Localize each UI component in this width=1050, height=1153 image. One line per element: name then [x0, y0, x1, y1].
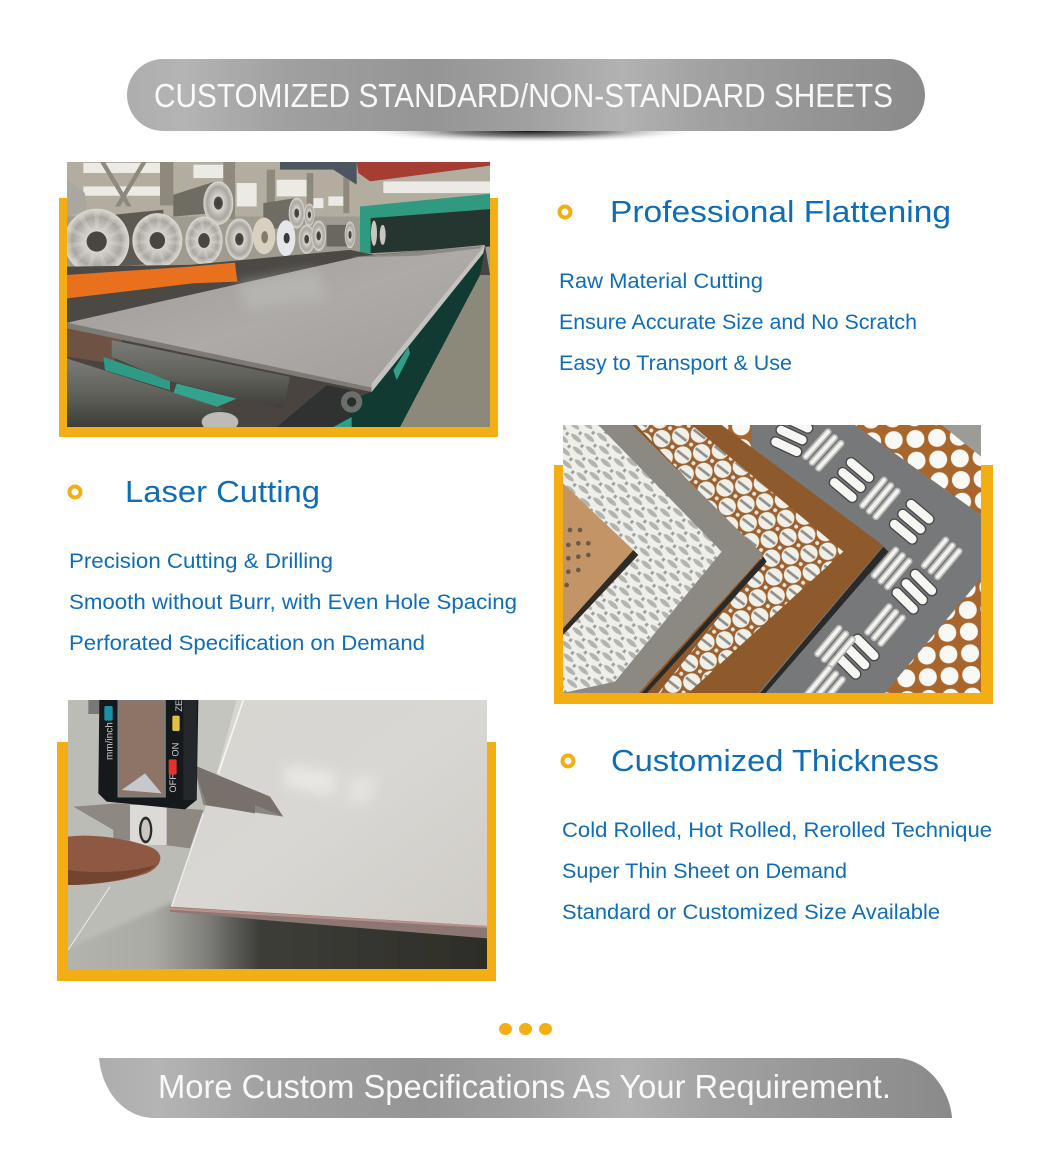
- photo: caliper measuring sheet thickness: ZE: [174, 700, 184, 712]
- list item: Standard or Customized Size Available: [562, 901, 940, 924]
- photo: perforated metal sheets: [563, 425, 981, 693]
- list item: Perforated Specification on Demand: [69, 632, 425, 655]
- title: CUSTOMIZED STANDARD/NON-STANDARD SHEETS: [154, 77, 893, 114]
- banner pill: [127, 59, 925, 131]
- heading: Laser Cutting: [125, 474, 320, 509]
- list item: Cold Rolled, Hot Rolled, Rerolled Technique: [562, 819, 992, 842]
- heading: Customized Thickness: [611, 743, 939, 778]
- panel: flattening photo: [59, 162, 498, 437]
- list item: Super Thin Sheet on Demand: [562, 860, 847, 883]
- bottom banner: [99, 1058, 952, 1118]
- bullet ring: [560, 206, 570, 218]
- three dots: [499, 1023, 552, 1035]
- panel: laser cutting text: [69, 474, 517, 655]
- photo: caliper measuring sheet thickness: mm/inch: [104, 722, 115, 760]
- title banner: [127, 59, 925, 143]
- photo frame: [554, 465, 993, 704]
- banner text: More Custom Specifications As Your Requirement.: [158, 1068, 891, 1105]
- list item: Smooth without Burr, with Even Hole Spacing: [69, 591, 517, 614]
- list item: Raw Material Cutting: [559, 270, 763, 293]
- photo: caliper measuring sheet thickness: ON: [170, 743, 180, 757]
- bullet ring: [562, 756, 574, 766]
- photo: caliper measuring sheet thickness: OFF: [168, 774, 178, 793]
- panel: customized thickness text: [562, 743, 992, 924]
- list item: Easy to Transport & Use: [559, 352, 792, 375]
- heading: Professional Flattening: [610, 194, 951, 229]
- banner shape: [99, 1058, 952, 1118]
- list item: Precision Cutting & Drilling: [69, 550, 333, 573]
- photo: caliper measuring sheet thickness: [68, 700, 487, 969]
- panel: laser cutting photo: [554, 412, 993, 709]
- banner shadow: [355, 119, 705, 143]
- photo frame: [59, 198, 498, 437]
- bullet ring: [70, 486, 80, 498]
- photo frame: [57, 742, 496, 981]
- list item: Ensure Accurate Size and No Scratch: [559, 311, 917, 334]
- photo: steel sheet on rollers in factory: [67, 162, 490, 427]
- panel: professional flattening text: [559, 194, 951, 375]
- panel: thickness photo: [57, 700, 497, 983]
